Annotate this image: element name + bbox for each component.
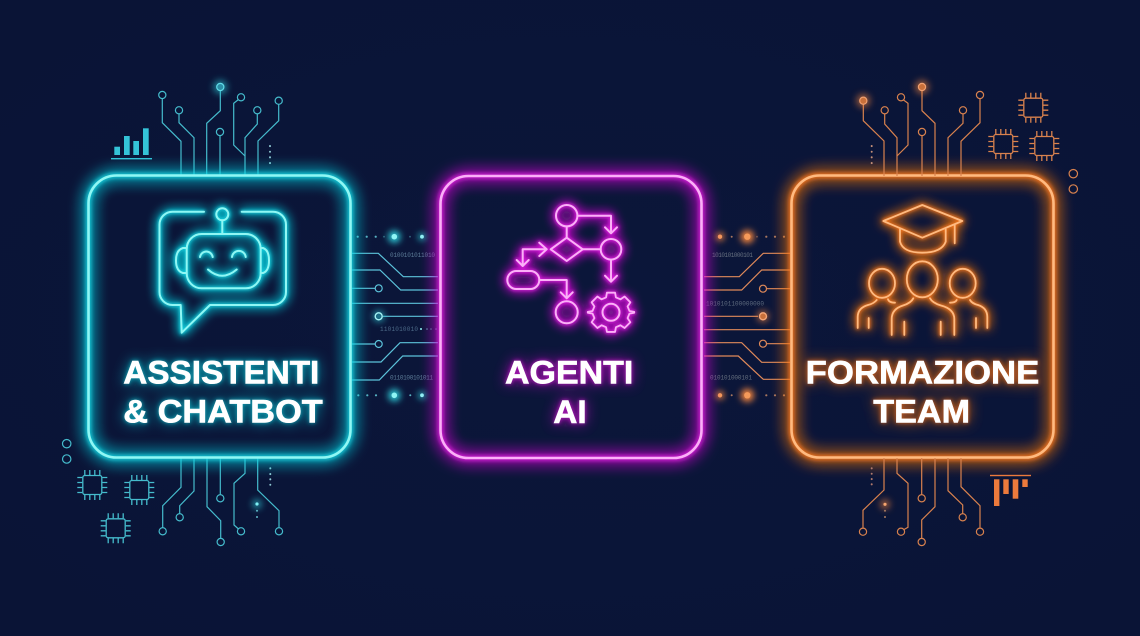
- circuit: orange bottom traces: [859, 458, 984, 546]
- icon: cyan bar chart: [111, 128, 152, 159]
- binary text: cyan connector middle: 1101010010: [380, 326, 418, 333]
- binary text: cyan connector top: 0100101011010: [390, 252, 435, 259]
- icon: robot chatbot: [160, 208, 286, 333]
- icon: orange inverted bar chart: [990, 475, 1031, 506]
- binary text: cyan connector bottom: 0110100101011: [390, 374, 433, 382]
- heading: assistenti & chatbot: ASSISTENTI: [123, 354, 319, 390]
- heading: assistenti & chatbot: & CHATBOT: [123, 394, 323, 430]
- icon: workflow diagram with gear: [507, 205, 634, 332]
- circuit: cyan top traces: [159, 80, 282, 176]
- heading: formazione team: TEAM: [873, 394, 970, 430]
- heading: agenti ai: [505, 354, 633, 430]
- circuit: connectors between cyan and magenta panels: [352, 231, 438, 401]
- circuit: orange top traces: [856, 80, 1078, 193]
- panel: assistenti e chatbot: [88, 176, 350, 458]
- heading: formazione team: TEAM: [873, 394, 970, 430]
- icon: orange chips: [988, 93, 1059, 161]
- icon: cyan chips: [77, 470, 154, 543]
- heading: assistenti & chatbot: ASSISTENTI: [123, 354, 319, 390]
- heading: agenti ai: AGENTI: [505, 354, 633, 390]
- heading: agenti ai: AI: [553, 394, 587, 430]
- circuit: cyan bottom traces: [62, 440, 283, 546]
- panel: formazione team: [792, 176, 1054, 458]
- binary text: orange connector bottom: 010101000101: [710, 374, 752, 382]
- panel: agenti ai: [440, 176, 702, 458]
- icon: graduation cap and team: [858, 205, 987, 335]
- heading: assistenti & chatbot: & CHATBOT: [123, 394, 323, 430]
- heading: formazione team: FORMAZIONE: [806, 354, 1039, 390]
- heading: assistenti & chatbot: [123, 354, 323, 430]
- heading: agenti ai: AI: [553, 394, 587, 430]
- heading: formazione team: FORMAZIONE: [806, 354, 1039, 390]
- heading: formazione team: [806, 354, 1039, 430]
- binary text: orange connector middle: 1010101100000000: [706, 300, 764, 308]
- circuit: connectors between magenta and orange panels: [704, 230, 790, 402]
- heading: agenti ai: AGENTI: [505, 354, 633, 390]
- binary text: orange connector top: 1010101000101: [712, 252, 753, 259]
